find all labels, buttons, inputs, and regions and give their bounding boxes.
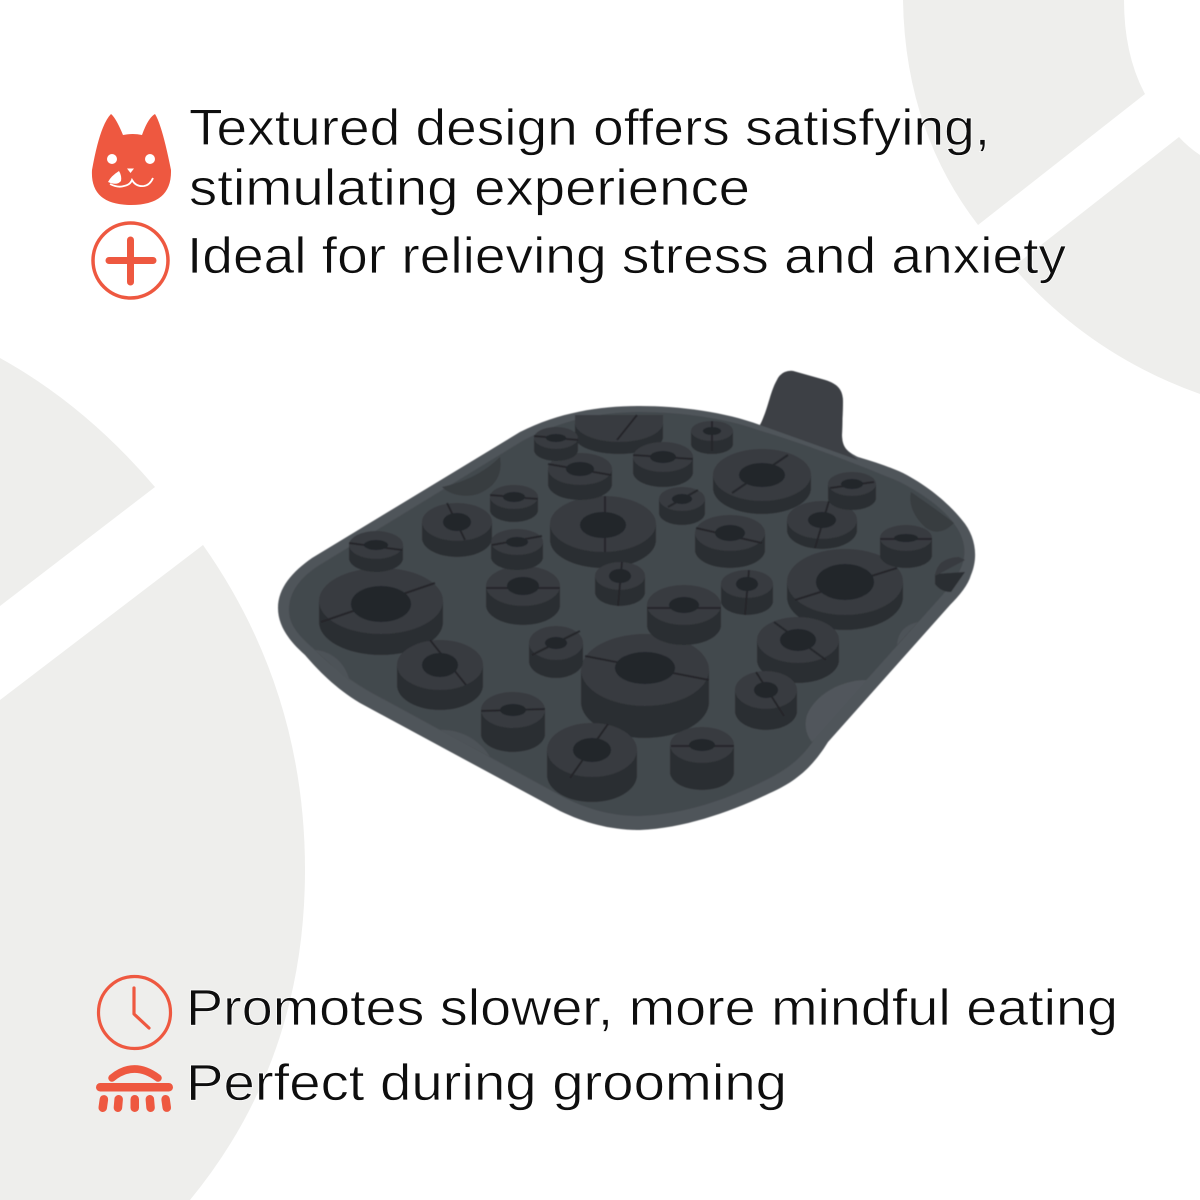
text: slower eating: Promotes slower, more mindful eating <box>186 979 1118 1036</box>
product photo: silicone lick mat <box>278 371 975 830</box>
mat inner floor <box>289 412 964 816</box>
text: stress and anxiety: Ideal for relieving stress and anxiety <box>187 227 1067 284</box>
text: textured design <box>189 99 990 216</box>
text: textured design: stimulating experience <box>189 159 750 216</box>
icon: plus in circle <box>93 223 168 298</box>
text: perfect during grooming: Perfect during grooming <box>186 1054 787 1111</box>
icon: clock <box>98 976 170 1048</box>
icon: grooming brush <box>96 1069 173 1113</box>
text: textured design: Textured design offers satisfying, <box>189 99 990 156</box>
mat tab <box>760 371 858 460</box>
mat body <box>278 371 975 830</box>
icon: cat face <box>92 114 171 205</box>
corner bumps <box>315 457 954 757</box>
raised rings <box>319 415 965 802</box>
